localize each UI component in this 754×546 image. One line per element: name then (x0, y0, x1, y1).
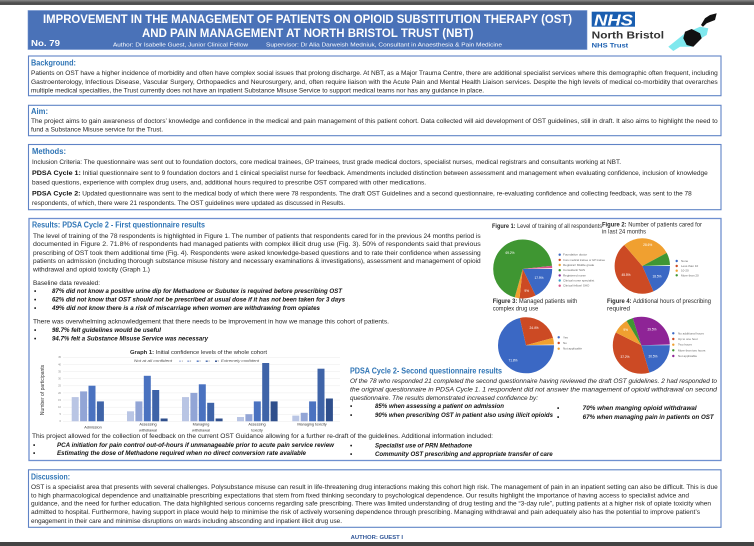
text: confidence increases: • (350, 403, 353, 410)
bar chart: graph 1 confidence levels: Admission (84, 426, 102, 430)
header: title banner: IMPROVEMENT IN THE MANAGEMENT OF PATIENTS ON OPIOID SUBSTITUTION THERAPY (OST) (43, 12, 572, 26)
pie chart: figure 2 patients cared for: None (681, 259, 689, 263)
text: second questionnaire summary: questionnaire. The results demonstrated increased confidence by: (350, 395, 538, 402)
text: aim body (31, 118, 718, 134)
pie chart: figure 1 level of training: Registrar/ Middle grade (563, 263, 595, 267)
text: acknowledgement: There was overwhelming acknowledgement that there needs to be improvement in how we manage this cohort of patients. (33, 318, 389, 326)
bar chart: graph 1 confidence levels: 1 (182, 360, 184, 363)
header: title banner: Supervisor: Dr Alia Darweish Medniuk, Consultant in Anaesthesia & Pain Medicine (266, 42, 502, 48)
text: acknowledgement: 94.7% felt a Substance Misuse Service was necessary (52, 336, 209, 343)
pie chart: figure 3 complex drug use (493, 299, 582, 363)
text: methods body: respondents, of which, there were 21 respondents. The OST guidelines were updated as discussed in Results. (32, 200, 345, 207)
bar chart: graph 1 confidence levels: Not at all confident (134, 358, 173, 363)
text: feedback on guidance: Estimating the dose of Methadone required when no direct conversion rate available (57, 450, 307, 457)
text: background body: Patients on OST have a higher incidence of morbidity and often have complex social issues that prolong discharge. At NBT, as a Major Trauma Centre, there are additional specialist services where this demographic often frequent, including (31, 70, 718, 77)
pie chart: figure 4 additional hours: required (607, 306, 630, 312)
pie chart: figure 4 additional hours: More than two hours (678, 348, 706, 352)
pie chart: figure 1 level of training: Foundation doctor (563, 253, 587, 257)
pie chart: figure 3 complex drug use: 24.4% (529, 326, 539, 330)
pie chart: figure 3 complex drug use: 71.8% (508, 359, 518, 363)
pie chart: figure 2 patients cared for: Less than 10 (681, 264, 699, 268)
text: background body: multiple medical specialties, the Trust currently does not have an inpatient Substance Misuse Service to support medical teams nor has any guidance in place. (31, 87, 484, 94)
text: methods body (32, 159, 708, 207)
text: baseline data: 49% did not know there is a risk of miscarriage when women are withdrawing from opiates (51, 305, 321, 312)
text: feedback on guidance: • (350, 451, 353, 458)
heading: background: Background: (31, 59, 76, 68)
text: feedback on guidance: • (33, 442, 36, 449)
pie chart: figure 1 level of training: Core medical trainee or GP trainee (563, 258, 605, 262)
heading: methods: Methods: (32, 147, 66, 156)
text: results summary: documented in Figure 2. 71.8% of respondents had managed patients with complex illicit drug use (Fig. 3). 50% of respondents said that previous (33, 241, 481, 248)
pie chart: figure 2 patients cared for: Figure 2: Number of patients cared for (602, 222, 702, 228)
pie chart: figure 1 level of training: 9% (524, 289, 529, 293)
text: baseline data: • (34, 288, 37, 295)
bar chart: graph 1 confidence levels: 4 (208, 360, 210, 363)
heading: results first questionnaire: Results: PDSA Cycle 2 - First questionnaire results (32, 220, 206, 230)
bar chart: graph 1 confidence levels: 5 (60, 412, 62, 416)
text: feedback on guidance: PCA initiation for pain control out-of-hours if unmanageable prior to acute pain service review (57, 442, 335, 449)
text: baseline data: 62% did not know that OST should not be prescribed at usual dose if it has not been taken for 3 days (52, 297, 346, 304)
panel: discussion (28, 470, 721, 527)
text: background body (31, 70, 718, 94)
pie chart: figure 1 level of training: Registered nurse (563, 273, 586, 277)
text: feedback on guidance: Community OST prescribing and appropriate transfer of care (375, 451, 553, 458)
text: feedback on guidance: This project allowed for the collection of feedback on the current OST Guidance allowing for a further re-draft of the guidelines. Additional information included: (32, 433, 493, 440)
pie chart: figure 4 additional hours: Figure 4: Additional hours of prescribing (607, 299, 711, 305)
text: feedback on guidance (32, 433, 553, 458)
text: methods body: PDSA Cycle 1: Initial questionnaire sent to 9 foundation doctors and 1 clinical specialist nurse for feedback. Amendments included distinction between assessment and management when evaluating confidence, inclusion of knowledge (32, 170, 708, 177)
text: results summary: patients on admission (including thorough substance misuse history and necessary examinations & investigations), assessment and management of opioid (33, 258, 481, 265)
pie chart: figure 3 complex drug use: complex drug use (493, 307, 539, 313)
text: acknowledgement (33, 318, 389, 343)
pie chart: figure 1 level of training: Clinical nurse specialist (563, 278, 594, 282)
panel: aim (28, 105, 721, 136)
bar chart: graph 1 confidence levels: Assessing (139, 422, 157, 426)
logo: NHS North Bristol Trust (592, 12, 664, 49)
pie chart: figure 1 level of training: Figure 1: Level of training of all respondents (492, 224, 602, 230)
text: methods body: Inclusion Criteria: The questionnaire was sent out to foundation doctors, core medical trainees, GP trainees, trust grade medical doctors, specialist nurses, medical registrars and consultants working at NBT. (32, 159, 621, 166)
bar chart: graph 1 confidence levels: withdrawal (192, 428, 210, 432)
logo: NHS North Bristol Trust: NHS Trust (592, 42, 629, 49)
bar chart: graph 1 confidence levels: toxicity (251, 428, 263, 432)
bar chart: graph 1 confidence levels: 40 (58, 362, 62, 366)
text: baseline data (33, 280, 346, 312)
bar chart: graph 1 confidence levels: Number of participants (40, 364, 46, 415)
pie chart: figure 2 patients cared for: in last 24 months (602, 230, 646, 236)
bar chart: graph 1 confidence levels: 3 (199, 360, 201, 363)
bar chart: graph 1 confidence levels: 5 (218, 360, 220, 363)
pie chart: figure 4 additional hours: 37.2% (620, 355, 630, 359)
text: aim body: fund a Substance Misuse service for the Trust. (31, 127, 163, 134)
pie chart: figure 2 patients cared for (602, 222, 702, 280)
pie chart: figure 1 level of training: 17.9% (534, 276, 544, 280)
pie chart: figure 1 level of training: 69.2% (505, 251, 515, 255)
pie chart: figure 4 additional hours: 9% (623, 328, 628, 332)
pie chart: figure 2 patients cared for: More than 20 (681, 273, 699, 277)
pie chart: figure 4 additional hours: No additional hours (678, 331, 704, 335)
pie chart: figure 2 patients cared for: 28.6% (643, 243, 652, 247)
heading: second questionnaire results: PDSA Cycle 2- Second questionnaire results (350, 366, 503, 376)
text: aim body: The project aims to gain awareness of doctors’ knowledge and confidence in the medical and pain management of this patient cohort. Data collected will aid development of OST guidelines, still in draft. It also aims to highlight the need to (31, 118, 718, 125)
text: discussion body: to high pharmacological dependence and unattainable prescribing expectations that stem from fixed thinking secondary to psychological dependence. Our results highlight the importance of having access to specialist advice and (31, 492, 690, 499)
pie chart: figure 3 complex drug use: No (563, 341, 567, 345)
pie chart: figure 2 patients cared for: 18.5% (652, 275, 662, 279)
bar chart: graph 1 confidence levels: Managing (193, 422, 209, 426)
text: confidence increases: 67% when managing pain in patients on OST (583, 414, 715, 421)
logo: NHS North Bristol Trust: NHS (594, 12, 634, 29)
bar chart: graph 1 confidence levels: 0 (60, 419, 62, 423)
bar chart: graph 1 confidence levels: 20 (58, 391, 62, 395)
text: results summary: The level of training of the 78 respondents is highlighted in Figure 1. The number of patients that respondents cared for in the previous 24 months period is (33, 233, 481, 240)
pie chart: figure 3 complex drug use: Not applicable (563, 347, 582, 351)
bar chart: graph 1 confidence levels: withdrawal (139, 428, 157, 432)
panel: results (29, 218, 721, 460)
icon: regional map (668, 13, 717, 51)
text: feedback on guidance: • (33, 450, 36, 457)
bar chart: graph 1 confidence levels: 45 (58, 355, 62, 359)
text: baseline data: 87% did not know a positive urine dip for Methadone or Subutex is required before prescribing OST (52, 288, 343, 295)
bar chart: graph 1 confidence levels: 10 (58, 405, 62, 409)
pie chart: figure 4 additional hours: 20.5% (648, 355, 658, 359)
bar chart: graph 1 confidence levels: 25 (58, 384, 62, 388)
text: discussion body (31, 484, 718, 525)
pie chart: figure 4 additional hours: Not applicable (678, 354, 697, 358)
bar chart: graph 1 confidence levels: 30 (58, 377, 62, 381)
header: title banner: AND PAIN MANAGEMENT AT NORTH BRISTOL TRUST (NBT) (142, 26, 474, 40)
text: baseline data: Baseline data revealed: (33, 280, 100, 287)
text: second questionnaire summary (350, 378, 718, 402)
text: confidence increases (350, 403, 715, 421)
text: confidence increases: • (557, 414, 560, 421)
bar chart: graph 1 confidence levels: 35 (58, 370, 62, 374)
text: baseline data: • (34, 305, 37, 312)
text: discussion body: guidance, and the need for further education. The data highlighted serious concerns regarding safe prescribing. There was limited understanding of drug testing and the “3-day rule”, putting patients at a higher risk of opiate toxicity when (31, 501, 712, 508)
pie chart: figure 4 additional hours: Two hours (678, 343, 692, 347)
pie chart: figure 3 complex drug use: Yes (563, 335, 568, 339)
text: baseline data: • (34, 297, 37, 304)
text: confidence increases: • (350, 412, 353, 419)
text: discussion body: admitted to hospital. Furthermore, having support in place would help to minimise the risk of actively worsening dependence through prescribing. Managing withdrawal and pain adequately also has the potential to improve patient’s (31, 509, 700, 516)
pie chart: figure 4 additional hours: Up to one hour (678, 337, 698, 341)
bar chart: graph 1 confidence levels: Managing toxicity (297, 422, 327, 426)
bar chart: graph 1 confidence levels: Assessing (248, 422, 266, 426)
text: second questionnaire summary: Of the 78 who responded 21 completed the second questionnaire having reviewed the draft OST guidelines. 2 had responded to (350, 378, 718, 385)
pie chart: figure 3 complex drug use: Figure 3: Managed patients with (493, 299, 577, 305)
header: title banner (28, 10, 587, 50)
heading: discussion: Discussion: (31, 472, 70, 481)
text: methods body: based questions, experience with complex drug users, and, additional hours required to prescribe OST compared with other medications. (32, 179, 426, 186)
panel: methods (28, 144, 721, 210)
bar chart: graph 1 confidence levels: 15 (58, 398, 62, 402)
bar chart: graph 1 confidence levels: 2 (190, 360, 192, 363)
pie chart: figure 4 additional hours (607, 299, 711, 360)
panel: background (28, 56, 721, 96)
text: confidence increases: 90% when prescribing OST in patient also using illicit opioids (375, 412, 554, 419)
text: acknowledgement: • (34, 336, 37, 343)
text: discussion body: OST is a specialist area that presents with several challenges. Polysubstance misuse can result in life-threatening drug interactions making this cohort high risk. The management of pain in an inpatient setting can also be difficult. This is due (31, 484, 718, 491)
heading: aim: Aim: (31, 107, 48, 116)
bar chart: graph 1 confidence levels (40, 350, 340, 432)
text: methods body: PDSA Cycle 2: Updated questionnaire was sent to the medical body of which there were 78 respondents. The draft OST Guidelines and a second questionnaire, re-evaluating confidence and collecting feedback, was sent to the 78 (32, 190, 692, 198)
pie chart: figure 1 level of training (492, 224, 605, 293)
text: results summary (32, 233, 481, 273)
text: results summary: withdrawal and opioid toxicity (Graph 1.) (32, 266, 150, 273)
text: feedback on guidance: Specialist use of PRN Methadone (375, 442, 473, 450)
footer: author credit: AUTHOR: GUEST I (351, 535, 403, 541)
text: feedback on guidance: • (350, 442, 353, 450)
header: title banner: No. 79 (31, 39, 61, 48)
bar chart: graph 1 confidence levels: Graph 1: Initial confidence levels of the whole cohort (130, 350, 267, 356)
pie chart: figure 4 additional hours: 29.5% (647, 328, 657, 332)
pie chart: figure 1 level of training: Clinical fellow/ SHO (563, 284, 590, 288)
pie chart: figure 1 level of training: Consultant/ SAS (563, 268, 585, 272)
text: confidence increases: 70% when manging opioid withdrawal (583, 405, 697, 412)
text: discussion body: engagement in their care and minimise disruptions on wards including absconding and inpatient illicit drug use. (31, 518, 342, 525)
text: second questionnaire summary: the original questionnaire in PDSA Cycle 1. 1 respondent did not answer the management of opioid withdrawal on second (350, 386, 718, 394)
header: title banner: Author: Dr Isabelle Guest, Junior Clinical Fellow (113, 42, 248, 48)
text: results summary: prescribing of OST took them additional time (Fig. 4). Respondents were asked knowledge-based questions and to rate their confidence when assessing (33, 250, 481, 257)
bar chart: graph 1 confidence levels: Extremely confident (221, 358, 260, 363)
text: background body: Gastroenterology, Infectious Disease, Vascular Surgery, Orthopaedics and Neurosurgery, and, often require liaison with the Acute Pain and Mental Health Liaison services. Despite the high levels of medical co-morbidity that overarches (31, 79, 718, 86)
text: confidence increases: • (557, 405, 560, 412)
text: confidence increases: 85% when assessing a patient on admission (375, 403, 504, 410)
text: acknowledgement: • (34, 327, 37, 334)
pie chart: figure 2 patients cared for: 10-20 (681, 269, 689, 273)
pie chart: figure 2 patients cared for: 45.5% (621, 273, 631, 277)
text: acknowledgement: 98.7% felt guidelines would be useful (52, 327, 161, 334)
logo: NHS North Bristol Trust: North Bristol (592, 30, 664, 41)
